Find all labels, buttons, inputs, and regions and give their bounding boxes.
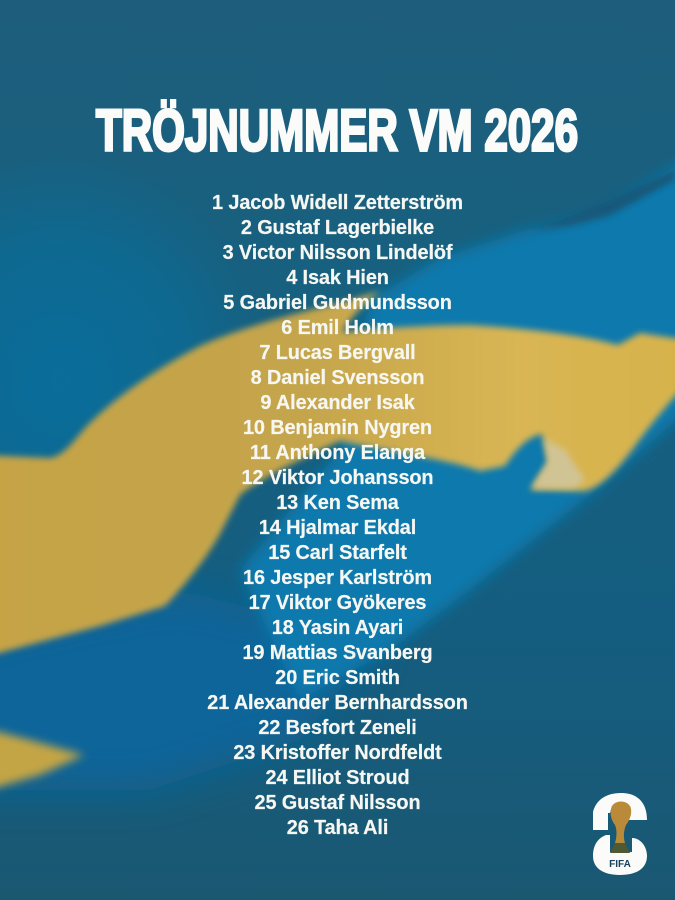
numeral 6 — [593, 835, 647, 875]
player 2: 2 Gustaf Lagerbielke — [241, 216, 434, 238]
player 19: 19 Mattias Svanberg — [242, 642, 433, 664]
numeral 2 — [593, 793, 647, 830]
player 21: 21 Alexander Bernhardsson — [207, 692, 468, 714]
player 8: 8 Daniel Svensson — [251, 366, 424, 388]
player 18: 18 Yasin Ayari — [272, 616, 403, 638]
player 20: 20 Eric Smith — [275, 666, 400, 688]
player 9: 9 Alexander Isak — [260, 392, 415, 414]
player 17: 17 Viktor Gyökeres — [249, 592, 426, 614]
player 3: 3 Victor Nilsson Lindelöf — [223, 242, 452, 264]
squad number list — [207, 192, 468, 838]
player 7: 7 Lucas Bergvall — [259, 342, 416, 364]
lower left yellow wedge — [0, 727, 84, 792]
player 11: 11 Anthony Elanga — [250, 442, 425, 464]
player 13: 13 Ken Sema — [276, 492, 399, 514]
player 1: 1 Jacob Widell Zetterström — [212, 192, 463, 214]
player 16: 16 Jesper Karlström — [243, 566, 432, 588]
player 23: 23 Kristoffer Nordfeldt — [233, 742, 442, 764]
dark fold, upper right — [535, 170, 675, 230]
bright blue flag panel, right — [240, 150, 675, 700]
pale flag fold — [532, 438, 585, 488]
player 6: 6 Emil Holm — [281, 316, 394, 338]
player 15: 15 Carl Starfelt — [268, 542, 407, 564]
FIFA wordmark: FIFA — [609, 859, 631, 870]
player 22: 22 Besfort Zeneli — [258, 716, 417, 738]
player 14: 14 Hjalmar Ekdal — [259, 516, 416, 538]
trophy — [610, 802, 631, 853]
yellow main flag stripe — [0, 291, 675, 658]
player 25: 25 Gustaf Nilsson — [254, 792, 420, 814]
lower left blue band — [0, 590, 380, 790]
player 24: 24 Elliot Stroud — [266, 766, 409, 788]
player 10: 10 Benjamin Nygren — [243, 416, 432, 438]
player 26: 26 Taha Ali — [287, 816, 388, 838]
player 12: 12 Viktor Johansson — [242, 466, 433, 488]
player 4: 4 Isak Hien — [286, 266, 389, 288]
left blue glow — [0, 150, 270, 610]
player 5: 5 Gabriel Gudmundsson — [223, 292, 452, 314]
